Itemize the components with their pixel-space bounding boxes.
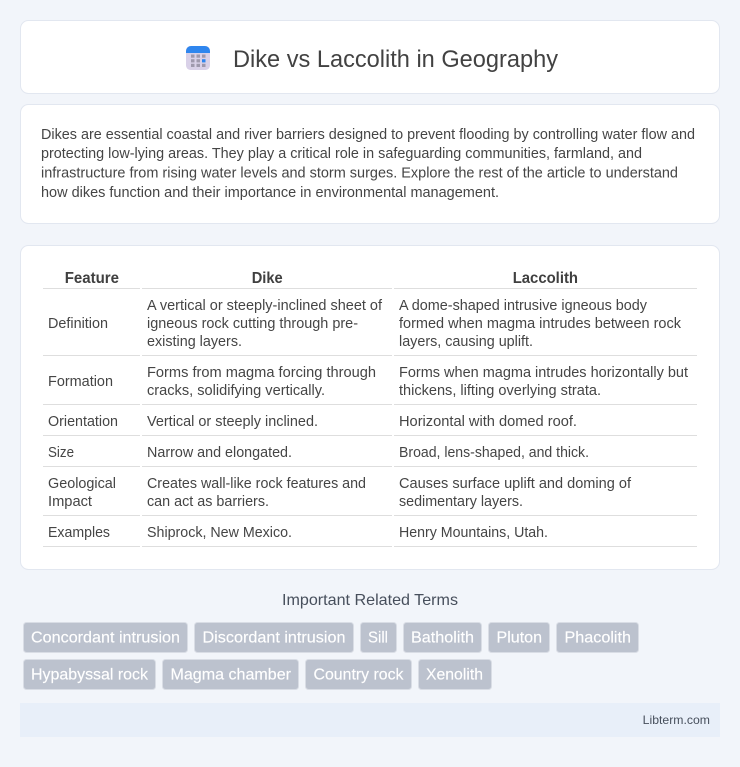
table header: Dike <box>252 270 283 287</box>
row: formation: Formation <box>48 374 113 390</box>
table header: Laccolith <box>513 270 578 287</box>
tags: related terms <box>24 622 638 690</box>
tags: related terms: Sill <box>368 630 388 647</box>
tags: related terms: Pluton <box>496 630 542 647</box>
row: definition: A vertical or steeply-inclined sheet of <box>147 298 383 314</box>
footer <box>20 703 720 737</box>
row: examples: Shiprock, New Mexico. <box>147 525 292 541</box>
footer: Libterm.com <box>643 713 710 727</box>
row: definition: A dome-shaped intrusive igneous body <box>399 298 648 314</box>
icon: calendar <box>186 46 210 70</box>
row: definition: igneous rock cutting through pre- <box>147 316 358 332</box>
row: size <box>48 445 589 461</box>
row: formation: Forms from magma forcing through <box>147 365 376 381</box>
row: formation: cracks, solidifying vertically. <box>147 383 325 399</box>
row: geological impact: Creates wall-like rock features and <box>147 476 366 492</box>
row: orientation: Vertical or steeply inclined. <box>147 414 318 430</box>
panel: comparison table <box>20 246 720 570</box>
row: geological impact: Causes surface uplift and doming of <box>399 476 632 492</box>
tags: related terms: Phacolith <box>564 630 631 647</box>
row: formation <box>48 365 688 399</box>
row: geological impact <box>48 476 632 510</box>
tags: related terms: Batholith <box>411 630 474 647</box>
tags: related terms: Country rock <box>314 667 404 684</box>
row: definition: Definition <box>48 316 108 332</box>
heading: important related terms: Important Related Terms <box>282 592 458 609</box>
text block: introduction paragraph: Dikes are essential coastal and river barriers designed to prevent flooding by controlling water flow and <box>41 127 695 143</box>
row: size: Size <box>48 445 74 461</box>
row: geological impact: Impact <box>48 494 92 510</box>
row: orientation <box>48 414 577 430</box>
row: definition: layers, causing uplift. <box>399 334 533 350</box>
panel: introduction <box>20 104 720 224</box>
row: examples: Examples <box>48 525 110 541</box>
table header <box>65 270 578 287</box>
row: formation: Forms when magma intrudes horizontally but <box>399 365 688 381</box>
tags: related terms: Discordant intrusion <box>202 630 346 647</box>
row: examples <box>48 525 548 541</box>
panel: title header <box>20 20 720 94</box>
row: size: Narrow and elongated. <box>147 445 292 461</box>
row: orientation: Orientation <box>48 414 118 430</box>
title: Dike vs Laccolith in Geography <box>233 46 558 73</box>
row: size: Broad, lens-shaped, and thick. <box>399 445 589 461</box>
row: definition <box>48 298 682 350</box>
row: formation: thickens, lifting overlying strata. <box>399 383 601 399</box>
tags: related terms: Magma chamber <box>170 667 292 684</box>
text block: introduction paragraph <box>41 127 695 201</box>
table header: Feature <box>65 270 119 287</box>
row: examples: Henry Mountains, Utah. <box>399 525 548 541</box>
text block: introduction paragraph: infrastructure from rising water levels and storm surges. Explore the rest of the article to understand <box>41 166 678 182</box>
row: geological impact: sedimentary layers. <box>399 494 523 510</box>
row: definition: formed when magma intrudes between rock <box>399 316 682 332</box>
row: geological impact: Geological <box>48 476 116 492</box>
row: definition: existing layers. <box>147 334 242 350</box>
row: geological impact: can act as barriers. <box>147 494 269 510</box>
tags: related terms: Concordant intrusion <box>31 630 180 647</box>
text block: introduction paragraph: how dikes function and their importance in environmental management. <box>41 185 499 201</box>
tags: related terms: Hypabyssal rock <box>31 667 149 684</box>
text block: introduction paragraph: protecting low-lying areas. They play a critical role in safeguarding communities, farmland, and <box>41 146 642 162</box>
tags: related terms: Xenolith <box>426 667 483 684</box>
row: orientation: Horizontal with domed roof. <box>399 414 577 430</box>
